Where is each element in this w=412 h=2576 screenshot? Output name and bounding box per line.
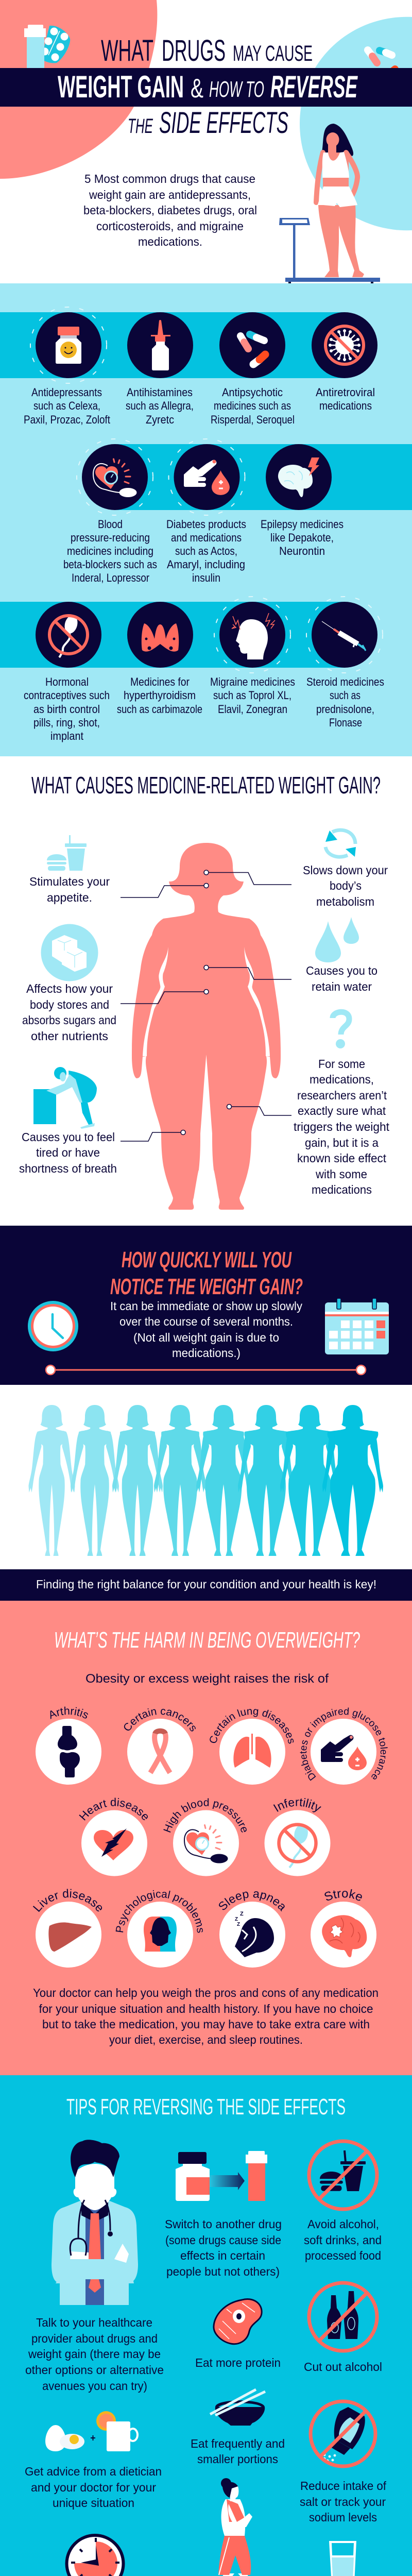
- text: dietician: Get advice from a dietician: [25, 2465, 162, 2478]
- icon: blister pack: [41, 26, 70, 63]
- icon: awareness ribbon: [150, 1731, 170, 1773]
- captions: second row: Amaryl, including: [167, 558, 245, 571]
- heading: [110, 1247, 303, 1299]
- icon: water glass: [329, 2541, 356, 2576]
- curved labels: Liver disease: [33, 1889, 102, 1912]
- text: switch: effects in certain: [180, 2249, 265, 2262]
- text: retain water: [306, 964, 377, 993]
- icon: blood pressure: [93, 459, 137, 497]
- icon: sleep apnea: Z: [237, 1922, 240, 1927]
- white circles: [36, 1719, 376, 1968]
- intro text: [83, 172, 257, 248]
- curved labels: Psychological problems: [115, 1890, 203, 1933]
- icon: water drops: [315, 917, 359, 962]
- icon: stroke brain: [322, 1915, 367, 1957]
- icon: sleep apnea: Z: [235, 1917, 238, 1922]
- title band: [0, 68, 412, 107]
- captions: third row: Flonase: [329, 716, 362, 729]
- captions: third row: Hormonal: [45, 675, 89, 688]
- icon: no salt: [311, 2401, 375, 2466]
- text: switch: Switch to another drug: [165, 2217, 282, 2231]
- captions: second row: insulin: [192, 571, 220, 584]
- text: avoid: soft drinks, and: [304, 2233, 382, 2247]
- icon: diabetes finger: [184, 460, 230, 495]
- captions: first row: [24, 386, 375, 426]
- title: SIDE EFFECTS: [159, 106, 288, 140]
- text: unknown cause: medications,: [310, 1073, 374, 1086]
- icon: steak: [214, 2299, 262, 2344]
- curved labels: Certain cancers: [124, 1708, 196, 1732]
- row of weight silhouettes: [29, 1405, 383, 1556]
- title: WHAT: [101, 34, 153, 67]
- title: HOW TO: [209, 77, 264, 102]
- text: It can be immediate or show up slowly: [110, 1299, 302, 1313]
- body silhouette: [132, 843, 281, 1210]
- text: unknown cause: researchers aren’t: [297, 1089, 387, 1102]
- text: eat frequently: [191, 2437, 285, 2466]
- text: sugars: Affects how your: [26, 982, 113, 995]
- sparkle rays: [30, 307, 383, 673]
- text: unknown cause: [294, 1057, 390, 1196]
- title: MAY CAUSE: [233, 41, 313, 66]
- text: salt: Reduce intake of: [300, 2479, 387, 2493]
- captions: second row: Neurontin: [279, 545, 325, 557]
- curved labels: [33, 1706, 388, 1933]
- text: [110, 1299, 302, 1360]
- text: doctor advice: [33, 1986, 379, 2046]
- icon: bowl and chopsticks: [210, 2389, 265, 2426]
- icon: joint: [58, 1726, 80, 1777]
- intro text: medications.: [138, 235, 202, 248]
- text: talk to provider: weight gain (there may be: [28, 2347, 161, 2361]
- icon: no sperm: [49, 614, 88, 657]
- text: doctor advice: your diet, exercise, and sleep routines.: [109, 2033, 303, 2046]
- text: tired: shortness of breath: [19, 1162, 117, 1175]
- icon: breakfast: [45, 2411, 138, 2451]
- captions: first row: Antihistamines: [127, 386, 193, 399]
- text: retain water: retain water: [312, 980, 372, 993]
- icon: burger and drink: [47, 835, 87, 871]
- text: talk to provider: other options or alternative: [25, 2363, 164, 2377]
- icon: high blood pressure: [184, 1825, 228, 1863]
- captions: second row: [63, 518, 344, 584]
- icon: smiling bottle: [56, 327, 81, 364]
- curved labels: Infertility: [273, 1798, 321, 1812]
- captions: third row: Medicines for: [130, 675, 190, 688]
- text: talk to provider: avenues you can try): [42, 2379, 147, 2393]
- text: avoid: Avoid alcohol,: [307, 2217, 379, 2231]
- captions: second row: such as Actos,: [175, 545, 237, 557]
- text: unknown cause: gain, but it is a: [305, 1136, 379, 1149]
- text: unknown cause: exactly sure what: [298, 1104, 386, 1117]
- panel: tips: [0, 2075, 412, 2576]
- heading: HOW QUICKLY WILL YOU: [122, 1247, 292, 1273]
- text: metabolism: [303, 863, 388, 908]
- icon: no fast food: [309, 2141, 377, 2209]
- captions: third row: such as Toprol XL,: [213, 689, 291, 702]
- text: switch: (some drugs cause side: [165, 2233, 281, 2247]
- text: medications.): [172, 1346, 241, 1360]
- text: talk to provider: Talk to your healthcare: [36, 2316, 152, 2329]
- timeline: [46, 1365, 366, 1375]
- intro text: corticosteroids, and migraine: [96, 219, 244, 233]
- captions: first row: medicines such as: [214, 399, 291, 412]
- captions: third row: such as carbimazole: [117, 703, 202, 716]
- curved labels: Certain lung diseases: [210, 1709, 294, 1743]
- text: over the course of several months.: [119, 1315, 293, 1328]
- captions: second row: like Depakote,: [270, 531, 334, 544]
- text: stimulates appetite: [29, 875, 110, 904]
- captions: first row: such as Allegra,: [126, 399, 194, 412]
- panel: how quickly: [0, 1226, 412, 1385]
- light blue background circle: [300, 17, 412, 230]
- text: doctor advice: but to take the medication, you may have to take extra care with: [42, 2018, 370, 2031]
- icon: infertility: [279, 1823, 316, 1868]
- text: stimulates appetite: Stimulates your: [29, 875, 110, 888]
- captions: first row: Antipsychotic: [222, 386, 283, 399]
- captions: first row: Zyretc: [146, 413, 174, 426]
- captions: third row: as birth control: [33, 703, 100, 716]
- captions: third row: contraceptives such: [24, 689, 110, 702]
- title: THE: [128, 115, 153, 138]
- subheading: Obesity or excess weight raises the risk of: [85, 1672, 329, 1686]
- captions: second row: Diabetes products: [166, 518, 246, 531]
- title: DRUGS: [162, 34, 226, 67]
- text: sugars: other nutrients: [31, 1029, 108, 1043]
- captions: third row: [24, 675, 384, 742]
- icon: metabolism arrows: [325, 830, 356, 857]
- captions: third row: such as: [330, 689, 360, 702]
- text: unknown cause: triggers the weight: [294, 1120, 390, 1133]
- header panel: [0, 0, 412, 284]
- banner: finding the right balance: Finding the right balance for your condition and your health is key!: [36, 1578, 376, 1591]
- panel: what causes weight gain: [19, 772, 390, 1210]
- captions: third row: pills, ring, shot,: [33, 716, 100, 729]
- curved labels: Stroke: [324, 1889, 362, 1901]
- captions: second row: beta-blockers such as: [63, 558, 157, 571]
- icon: no virus: [325, 326, 364, 364]
- text: talk to provider: [25, 2316, 164, 2393]
- captions: first row: Antidepressants: [31, 386, 102, 399]
- captions: second row: pressure-reducing: [71, 531, 150, 544]
- icon circles: [36, 312, 377, 668]
- captions: third row: implant: [50, 730, 83, 742]
- icon: heart disease: [94, 1828, 133, 1860]
- text: alcohol: Cut out alcohol: [304, 2360, 382, 2374]
- callout lines: [121, 873, 291, 1141]
- captions: first row: Risperdal, Seroquel: [211, 413, 295, 426]
- icon: switch drugs: [176, 2151, 267, 2201]
- text: doctor advice: Your doctor can help you weigh the pros and cons of any medication: [33, 1986, 379, 1999]
- text: metabolism: body’s: [330, 879, 362, 892]
- text: protein: Eat more protein: [195, 2356, 281, 2369]
- text: sugars: absorbs sugars and: [22, 1013, 116, 1027]
- curved labels: Sleep apnea: [219, 1891, 285, 1911]
- icon: sleep apnea: Z: [240, 1911, 244, 1917]
- icon: sleep clock: [67, 2535, 124, 2576]
- text: eat frequently: smaller portions: [197, 2452, 278, 2466]
- text: unknown cause: medications: [312, 1183, 372, 1196]
- text: dietician: [25, 2465, 162, 2510]
- curved labels: Arthritis: [50, 1706, 88, 1719]
- icon: question mark: [333, 1012, 349, 1048]
- text: metabolism: metabolism: [316, 895, 374, 908]
- icon: diabetes finger: [321, 1735, 367, 1770]
- captions: second row: Inderal, Lopressor: [72, 571, 149, 584]
- text: sugars: [22, 982, 116, 1043]
- text: retain water: Causes you to: [306, 964, 377, 977]
- text: salt: sodium levels: [309, 2511, 377, 2524]
- icon: brain: [278, 457, 319, 497]
- icon: psychological heads: [144, 1917, 177, 1952]
- text: unknown cause: with some: [315, 1167, 367, 1181]
- text: stimulates appetite: appetite.: [47, 891, 92, 904]
- icon: clock: [28, 1301, 78, 1351]
- coral background shape: [0, 0, 157, 179]
- captions: second row: and medications: [171, 531, 242, 544]
- icon: no alcohol: [309, 2283, 377, 2351]
- illustration: woman on scale: [279, 124, 380, 284]
- captions: first row: Paxil, Prozac, Zoloft: [24, 413, 110, 426]
- text: tired: [19, 1130, 117, 1175]
- text: doctor advice: for your unique situation and health history. If you have no choice: [39, 2002, 373, 2015]
- curved labels: Heart disease: [79, 1798, 148, 1821]
- icon: tired person: [33, 1067, 97, 1129]
- text: salt: [300, 2479, 387, 2524]
- icon: pills: [368, 50, 395, 78]
- icon: calendar: [325, 1298, 389, 1354]
- teal bands: [0, 312, 412, 668]
- title: [58, 34, 358, 140]
- captions: first row: Antiretroviral: [316, 386, 375, 399]
- icon: migraine head: [232, 613, 275, 659]
- curved labels: High blood pressure: [163, 1798, 247, 1833]
- intro text: 5 Most common drugs that cause: [84, 172, 255, 185]
- icon: liver: [48, 1922, 92, 1952]
- captions: second row: Blood: [98, 518, 123, 531]
- icon: sugar cubes: [41, 924, 98, 981]
- captions: second row: medicines including: [67, 545, 153, 557]
- icon: lungs: [233, 1734, 271, 1768]
- captions: third row: Steroid medicines: [306, 675, 384, 688]
- text: unknown cause: For some: [318, 1057, 365, 1071]
- text: avoid: [304, 2217, 382, 2262]
- text: (Not all weight gain is due to: [133, 1331, 279, 1344]
- captions: third row: Migraine medicines: [210, 675, 295, 688]
- icon: syringe: [322, 621, 366, 651]
- heading: NOTICE THE WEIGHT GAIN?: [110, 1274, 303, 1299]
- text: talk to provider: provider about drugs and: [31, 2332, 158, 2345]
- icon: sleep apnea: [235, 1911, 274, 1957]
- text: switch: [165, 2217, 282, 2278]
- text: salt: salt or track your: [300, 2495, 386, 2509]
- intro text: weight gain are antidepressants,: [89, 188, 251, 201]
- title: WEIGHT GAIN: [58, 70, 184, 104]
- captions: third row: Elavil, Zonegran: [218, 703, 287, 716]
- curved labels: Diabetes or impaired glucose tolerance: [300, 1707, 388, 1781]
- text: dietician: and your doctor for your: [31, 2481, 156, 2494]
- text: unknown cause: known side effect: [297, 1151, 387, 1165]
- text: avoid: processed food: [305, 2249, 381, 2262]
- text: metabolism: Slows down your: [303, 863, 388, 877]
- icon: thyroid: [142, 623, 179, 652]
- captions: second row: Epilepsy medicines: [261, 518, 344, 531]
- text: tired: tired or have: [36, 1146, 100, 1159]
- intro text: beta-blockers, diabetes drugs, oral: [83, 204, 257, 217]
- callout markers: [181, 870, 232, 1134]
- text: dietician: unique situation: [53, 2496, 134, 2510]
- captions: third row: hyperthyroidism: [124, 689, 196, 702]
- title: &: [191, 74, 203, 104]
- illustration: runner: [205, 2478, 270, 2576]
- text: sugars: body stores and: [30, 998, 109, 1011]
- captions: third row: prednisolone,: [316, 703, 374, 716]
- icon: pills: [241, 334, 265, 364]
- panel: medications: [0, 283, 412, 756]
- banner: finding the right balance: [0, 1569, 412, 1601]
- panel: harm in being overweight: [0, 1601, 412, 2075]
- captions: first row: such as Celexa,: [33, 399, 100, 412]
- text: eat frequently: Eat frequently and: [191, 2437, 285, 2450]
- icon: pill bottle: [24, 25, 46, 74]
- captions: first row: medications: [319, 399, 372, 412]
- illustration: doctor: [52, 2140, 138, 2305]
- icon: nasal spray: [151, 320, 170, 370]
- text: tired: Causes you to feel: [22, 1130, 115, 1144]
- text: switch: people but not others): [166, 2265, 280, 2278]
